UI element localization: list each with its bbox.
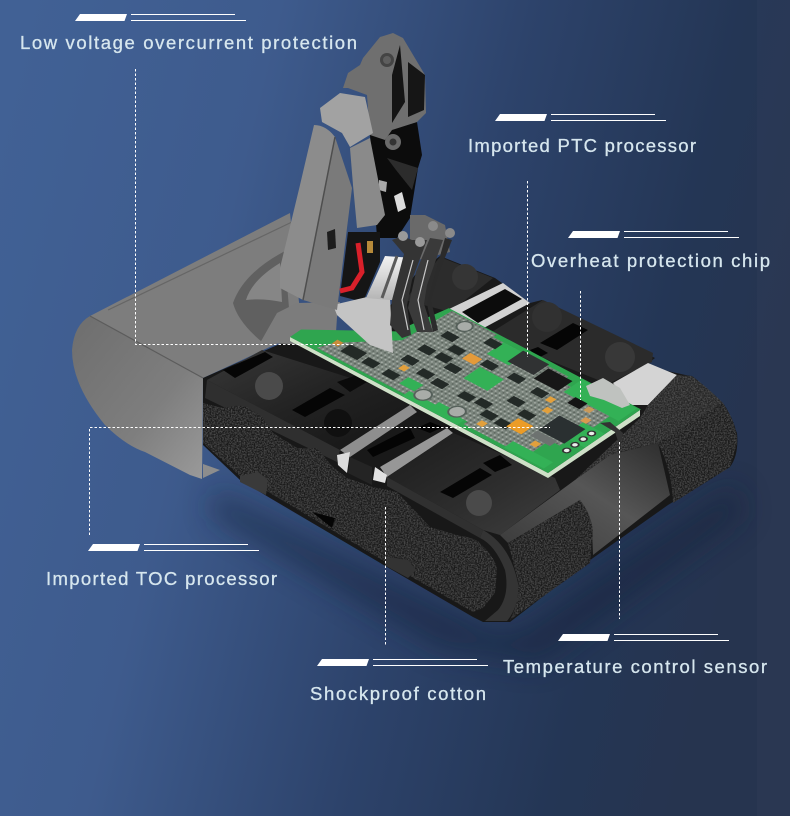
silver terminal and spring clips xyxy=(333,221,455,353)
label: imported TOC processor xyxy=(46,544,277,589)
drop shadow xyxy=(210,485,745,665)
bare green patches xyxy=(390,327,640,473)
solder pads xyxy=(561,430,597,454)
label: imported TOC processor: Imported TOC processor xyxy=(46,568,277,589)
label: low voltage overcurrent protection xyxy=(20,14,357,53)
solder tab xyxy=(586,378,630,408)
small components xyxy=(339,299,580,438)
speckled solder area xyxy=(317,287,628,465)
foam wrap xyxy=(203,403,497,612)
leader: imported TOC processor xyxy=(90,428,550,535)
grey socket ring xyxy=(233,250,290,342)
slot xyxy=(327,229,336,250)
label: shockproof cotton xyxy=(310,659,488,704)
battery illustration xyxy=(72,33,745,665)
upper right cell end xyxy=(575,375,723,480)
processor chips xyxy=(508,351,549,375)
leader: shockproof cotton xyxy=(384,507,386,645)
rear arm xyxy=(350,138,385,228)
grey battery body xyxy=(72,213,302,479)
mounting rings xyxy=(378,320,543,420)
metal bands and centre block xyxy=(350,412,453,485)
rear grey latch frame xyxy=(343,33,426,238)
green circuit board xyxy=(290,273,641,478)
grey latch handle xyxy=(280,93,385,310)
left housing plate xyxy=(207,350,420,450)
edge teeth xyxy=(240,472,268,495)
leader: imported PTC processor xyxy=(526,181,528,357)
main column xyxy=(280,125,335,300)
leader: temperature control sensor xyxy=(618,442,620,619)
leader: low voltage overcurrent protection xyxy=(136,69,353,344)
front black housing and foam xyxy=(203,335,737,622)
front end ring xyxy=(480,530,518,621)
label: imported PTC processor: Imported PTC processor xyxy=(468,135,696,156)
rear black cell plates xyxy=(330,215,690,480)
top cap xyxy=(320,93,373,147)
label: low voltage overcurrent protection: Low voltage overcurrent protection xyxy=(20,32,357,53)
leader: overheat protection chip xyxy=(580,291,582,400)
middle cell cylinder xyxy=(500,443,670,555)
sensor lead xyxy=(600,422,623,447)
label: overheat protection chip: Overheat protection chip xyxy=(531,250,770,271)
red wire compartment xyxy=(340,232,380,302)
label: temperature control sensor: Temperature control sensor xyxy=(503,656,767,677)
front foam pad xyxy=(508,500,593,620)
grey latch base xyxy=(260,302,340,348)
label: temperature control sensor xyxy=(503,634,767,677)
label: overheat protection chip xyxy=(531,231,770,271)
label: imported PTC processor xyxy=(468,114,696,156)
right housing plate xyxy=(387,433,560,535)
label: shockproof cotton: Shockproof cotton xyxy=(310,683,486,704)
orange capacitors xyxy=(506,418,533,434)
end foam pad xyxy=(658,403,737,503)
